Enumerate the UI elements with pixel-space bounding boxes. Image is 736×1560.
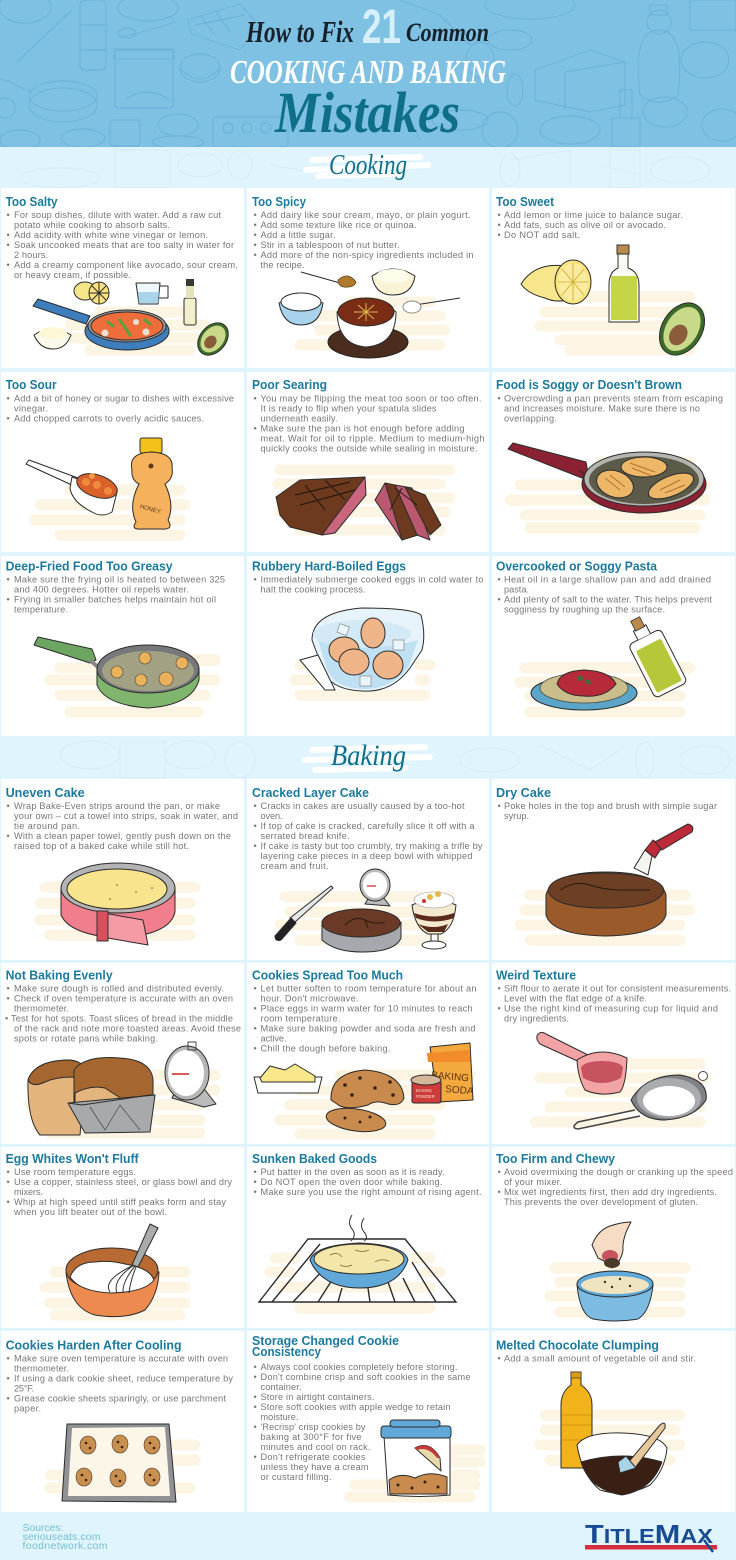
tips: If top of cake is cracked, carefully slice it off with a bbox=[260, 821, 475, 831]
tips: • bbox=[6, 240, 10, 250]
tips: • bbox=[254, 801, 257, 811]
panel: Melted Chocolate Clumping bbox=[492, 1331, 735, 1512]
heading: Too Sweet bbox=[496, 194, 555, 209]
tips: • bbox=[6, 394, 10, 404]
illustration: seared steak bbox=[276, 470, 450, 540]
tips bbox=[6, 574, 225, 614]
tips: your own – cut a towel into strips, soak in water, and bbox=[14, 811, 238, 821]
tips: active. bbox=[260, 1034, 286, 1044]
tips: and increases moisture. Make sure there is no bbox=[504, 404, 700, 414]
tips: • bbox=[6, 1354, 10, 1364]
tips bbox=[6, 1354, 233, 1414]
heading: Food is Soggy or Doesn't Brown bbox=[496, 377, 682, 392]
tips: If cake is tasty but too crumbly, try making a trifle by bbox=[260, 841, 483, 851]
tips: Avoid overmixing the dough or cranking up the speed bbox=[504, 1167, 733, 1177]
tips: container. bbox=[260, 1382, 302, 1392]
tips: You may be flipping the meat too soon or too often. bbox=[260, 394, 482, 404]
tips: • bbox=[6, 1197, 10, 1207]
tips: Chill the dough before baking. bbox=[260, 1044, 390, 1054]
tips: Grease cookie sheets sparingly, or use parchment bbox=[14, 1394, 226, 1404]
tips: Add a bit of honey or sugar to dishes with excessive bbox=[14, 394, 234, 404]
illustration: carrots scoop and honey bear bbox=[26, 438, 185, 535]
tips: Heat oil in a large shallow pan and add drained bbox=[504, 574, 711, 584]
tips: overlapping. bbox=[504, 414, 557, 424]
illustration: butter, cookies, baking powder, soda: BAKING bbox=[416, 1088, 432, 1093]
tips: moisture. bbox=[260, 1412, 298, 1422]
tips: It is ready to flip when your spatula slides bbox=[260, 404, 437, 414]
tips: • bbox=[498, 801, 501, 811]
tips: Add more of the non-spicy ingredients included in bbox=[260, 250, 474, 260]
illustration: cake pan with strip bbox=[40, 863, 195, 945]
tips: • bbox=[6, 831, 10, 841]
heading: Cookies Harden After Cooling bbox=[6, 1338, 182, 1352]
heading: Cooking: Cooking bbox=[329, 149, 407, 181]
illustration: lemon, olive oil and avocado bbox=[521, 245, 714, 363]
title line: Mistakes: Mistakes bbox=[274, 80, 460, 145]
tips: • bbox=[254, 210, 257, 220]
tips bbox=[498, 801, 717, 821]
illustration: measuring cup and sifter bbox=[535, 1032, 708, 1129]
tips: • bbox=[254, 1392, 257, 1402]
tips: hour. Don't microwave. bbox=[260, 994, 358, 1004]
tips: 'Recrisp' crisp cookies by bbox=[260, 1422, 366, 1432]
tips: vinegar. bbox=[14, 404, 48, 414]
panel: Too Spicy bbox=[247, 188, 489, 368]
tips bbox=[498, 394, 723, 424]
tips: raised top of a baked cake while still hot. bbox=[14, 841, 189, 851]
tips: Use the right kind of measuring cup for liquid and bbox=[504, 1004, 718, 1014]
tips: mixers. bbox=[14, 1187, 43, 1197]
tips bbox=[498, 984, 731, 1024]
heading: Not Baking Evenly bbox=[6, 968, 113, 982]
tips: underneath easily. bbox=[260, 414, 338, 424]
heading: Too Firm and Chewy bbox=[496, 1151, 616, 1166]
tips: • bbox=[254, 424, 257, 434]
tips: • bbox=[6, 414, 10, 424]
header banner bbox=[0, 0, 736, 150]
tips: tie around pan. bbox=[14, 821, 80, 831]
tips: serrated bread knife. bbox=[260, 831, 350, 841]
tips: Stir in a tablespoon of nut butter. bbox=[260, 240, 400, 250]
tips: • bbox=[498, 1167, 501, 1177]
tips: room temperature. bbox=[260, 1014, 340, 1024]
panel: Uneven Cake bbox=[1, 779, 244, 960]
tips: Add a creamy component like avocado, sour cream, bbox=[14, 260, 238, 270]
tips: • bbox=[498, 210, 501, 220]
tips bbox=[254, 1167, 482, 1197]
tips: Store soft cookies with apple wedge to retain bbox=[260, 1402, 450, 1412]
tips: meat. Wait for oil to ripple. Medium to medium-high bbox=[260, 434, 484, 444]
tips: • bbox=[6, 994, 10, 1004]
sources: seriouseats.com bbox=[22, 1531, 101, 1543]
tips: Let butter soften to room temperature for about an bbox=[260, 984, 476, 994]
illustration: cake and pastry brush bbox=[520, 824, 693, 940]
tips: • bbox=[6, 230, 10, 240]
tips: • bbox=[254, 574, 257, 584]
tips bbox=[6, 1167, 232, 1217]
tips: Make sure baking powder and soda are fresh and bbox=[260, 1024, 476, 1034]
illustration: carrots scoop and honey bear: HONEY bbox=[139, 504, 161, 516]
tips: Don't refrigerate cookies bbox=[260, 1452, 366, 1462]
tips: Do NOT add salt. bbox=[504, 230, 580, 240]
heading: Melted Chocolate Clumping bbox=[496, 1338, 659, 1352]
tips bbox=[5, 984, 241, 1044]
tips: • bbox=[254, 1024, 257, 1034]
tips bbox=[498, 574, 712, 614]
tips: Add lemon or lime juice to balance sugar. bbox=[504, 210, 683, 220]
tips: and 400 degrees. Hotter oil repels water. bbox=[14, 584, 189, 594]
tips: Soak uncooked meats that are too salty in water for bbox=[14, 240, 234, 250]
tips: dry ingredients. bbox=[504, 1014, 569, 1024]
section band: Baking bbox=[0, 737, 736, 778]
tips: • bbox=[6, 574, 10, 584]
tips: • bbox=[254, 1187, 257, 1197]
tips: • bbox=[6, 210, 10, 220]
panel: Weird Texture bbox=[492, 963, 735, 1144]
panel: Too Sour bbox=[1, 372, 244, 552]
heading: Overcooked or Soggy Pasta bbox=[496, 558, 658, 574]
tips: pasta. bbox=[504, 584, 529, 594]
tips: • bbox=[498, 394, 501, 404]
tips: Test for hot spots. Toast slices of bread in the middle bbox=[11, 1014, 233, 1024]
tips: Use a copper, stainless steel, or glass bowl and dry bbox=[14, 1177, 232, 1187]
tips: layering cake pieces in a deep bowl with whipped bbox=[260, 851, 472, 861]
tips: minutes and cool on rack. bbox=[260, 1442, 370, 1452]
panel: Rubbery Hard-Boiled Eggs bbox=[247, 556, 489, 736]
illustration: salty pan with lemon, cup, vinegar, avocado bbox=[33, 279, 235, 361]
title line: How to Fix 21 Common: 21 bbox=[362, 1, 401, 54]
tips: • bbox=[254, 240, 257, 250]
tips: • bbox=[6, 1177, 10, 1187]
tips: Frying in smaller batches helps maintain hot oil bbox=[14, 594, 216, 604]
illustration: butter, cookies, baking powder, soda: BAKING bbox=[431, 1070, 470, 1084]
tips bbox=[498, 210, 683, 240]
tips: • bbox=[498, 984, 501, 994]
tips: • bbox=[498, 220, 501, 230]
tips: or custard filling. bbox=[260, 1472, 332, 1482]
illustration: cookie sheet bbox=[50, 1424, 195, 1502]
tips: Add a little sugar. bbox=[260, 230, 336, 240]
tips: • bbox=[6, 984, 10, 994]
illustration: bread loaves, tin and thermometer bbox=[28, 1042, 216, 1135]
tips: • bbox=[254, 394, 257, 404]
tips: For soup dishes, dilute with water. Add a raw cut bbox=[14, 210, 221, 220]
tips bbox=[6, 394, 234, 424]
heading: Egg Whites Won't Fluff bbox=[6, 1151, 139, 1166]
tips bbox=[6, 210, 238, 280]
tips: Use room temperature eggs. bbox=[14, 1167, 136, 1177]
tips: With a clean paper towel, gently push down on the bbox=[14, 831, 231, 841]
panel: Cracked Layer Cake bbox=[247, 779, 489, 960]
tips: • bbox=[254, 250, 257, 260]
tips: thermometer. bbox=[14, 1364, 69, 1374]
heading: Too Salty bbox=[6, 194, 58, 209]
white brush behind heading bbox=[305, 747, 430, 770]
tips: • bbox=[6, 1374, 10, 1384]
tips: This prevents the over development of gluten. bbox=[504, 1197, 698, 1207]
tips: Add some texture like rice or quinoa. bbox=[260, 220, 416, 230]
tips: oven. bbox=[260, 811, 282, 821]
tips: Do NOT open the oven door while baking. bbox=[260, 1177, 442, 1187]
tips: • bbox=[254, 984, 257, 994]
logo: TitleMax: TITLE MAX bbox=[585, 1519, 714, 1549]
panel: Deep-Fried Food Too Greasy bbox=[1, 556, 244, 736]
tips: • bbox=[498, 230, 501, 240]
tips: • bbox=[5, 1014, 8, 1024]
tips: Poke holes in the top and brush with simple sugar bbox=[504, 801, 717, 811]
illustration: green pan with frying food bbox=[34, 637, 215, 712]
title line: Cooking and Baking: COOKING AND BAKING bbox=[230, 54, 506, 91]
tips: Add fats, such as olive oil or avocado. bbox=[504, 220, 666, 230]
tips: Wrap Bake-Even strips around the pan, or make bbox=[14, 801, 220, 811]
tips: sogginess by roughing up the surface. bbox=[504, 604, 665, 614]
tips: Whip at high speed until stiff peaks form and stay bbox=[14, 1197, 226, 1207]
tips: • bbox=[6, 594, 10, 604]
tips: If using a dark cookie sheet, reduce temperature by bbox=[14, 1374, 233, 1384]
heading: Too Sour bbox=[6, 377, 57, 392]
heading: Dry Cake bbox=[496, 785, 551, 800]
illustration: butter, cookies, baking powder, soda: POWDER bbox=[416, 1094, 435, 1099]
tips bbox=[254, 1362, 470, 1482]
illustration: knife, thermometer, cracked cake, trifle bbox=[275, 869, 456, 952]
tips: Add acidity with white wine vinegar or lemon. bbox=[14, 230, 208, 240]
tips: • bbox=[254, 1402, 257, 1412]
illustration: crowded pan with cutlets bbox=[508, 443, 706, 528]
tips bbox=[6, 801, 238, 851]
tips bbox=[254, 394, 484, 454]
heading: Baking: Baking bbox=[331, 739, 406, 772]
tips: • bbox=[254, 1167, 257, 1177]
heading: Uneven Cake bbox=[6, 785, 85, 800]
illustration: sunken bake on oven rack bbox=[259, 1215, 456, 1308]
tips: syrup. bbox=[504, 811, 529, 821]
tips: • bbox=[498, 1354, 501, 1364]
tips: thermometer. bbox=[14, 1004, 69, 1014]
panel: Overcooked or Soggy Pasta bbox=[492, 556, 735, 736]
illustration: chili with rice, cream, nut butter, sugar bbox=[279, 269, 460, 358]
tips: Place eggs in warm water for 10 minutes to reach bbox=[260, 1004, 472, 1014]
sources: foodnetwork.com bbox=[22, 1540, 108, 1552]
tips: temperature. bbox=[14, 604, 68, 614]
heading: Rubbery Hard-Boiled Eggs bbox=[252, 558, 406, 574]
tips: 25°F. bbox=[14, 1384, 34, 1394]
tips: Don't combine crisp and soft cookies in the same bbox=[260, 1372, 470, 1382]
tips bbox=[254, 801, 483, 871]
tips: Check if oven temperature is accurate with an oven bbox=[14, 994, 233, 1004]
tips: quickly cooks the outside while sealing in moisture. bbox=[260, 444, 478, 454]
tips: paper. bbox=[14, 1404, 41, 1414]
heading: Deep-Fried Food Too Greasy bbox=[6, 558, 173, 574]
panel: Cookies Harden After Cooling bbox=[1, 1331, 244, 1512]
tips: Add dairy like sour cream, mayo, or plain yogurt. bbox=[260, 210, 470, 220]
tips: Make sure the pan is hot enough before adding bbox=[260, 424, 464, 434]
illustration: glass bowl of eggs and ice water bbox=[295, 608, 430, 695]
tips: Immediately submerge cooked eggs in cold water to bbox=[260, 574, 484, 584]
tips: • bbox=[254, 230, 257, 240]
heading: Sunken Baked Goods bbox=[252, 1151, 377, 1166]
tips: • bbox=[254, 220, 257, 230]
tips: Make sure the frying oil is heated to between 325 bbox=[14, 574, 225, 584]
tips: cream and fruit. bbox=[260, 861, 328, 871]
tips bbox=[254, 210, 474, 270]
panel: Too Firm and Chewy bbox=[492, 1147, 735, 1328]
title line: How to Fix 21 Common: Common bbox=[406, 18, 489, 47]
panel: Dry Cake bbox=[492, 779, 735, 960]
tips: Level with the flat edge of a knife. bbox=[504, 994, 647, 1004]
panel: Storage Changed Cookie Consistency bbox=[247, 1331, 489, 1512]
tips: Mix wet ingredients first, then add dry ingredients. bbox=[504, 1187, 717, 1197]
tips: Add a small amount of vegetable oil and stir. bbox=[504, 1354, 696, 1364]
panel: Too Salty bbox=[1, 188, 244, 368]
section band: Cooking bbox=[0, 147, 736, 188]
panel: Cookies Spread Too Much bbox=[247, 963, 489, 1144]
illustration: whisk in orange bowl bbox=[45, 1224, 185, 1317]
heading: Storage Changed Cookie bbox=[252, 1333, 399, 1348]
illustration: butter, cookies, baking powder, soda bbox=[254, 1043, 474, 1135]
tips bbox=[498, 1167, 733, 1207]
tips: • bbox=[498, 1004, 501, 1014]
tips: • bbox=[254, 1177, 257, 1187]
tips: Sift flour to aerate it out for consistent measurements. bbox=[504, 984, 731, 994]
heading: Too Spicy bbox=[252, 194, 307, 209]
tips: • bbox=[254, 1362, 257, 1372]
tips: potato while cooking to absorb salts. bbox=[14, 220, 170, 230]
tips: • bbox=[6, 801, 10, 811]
tips bbox=[254, 984, 476, 1054]
footer bbox=[0, 1512, 736, 1560]
tips: when you lift beater out of the bowl. bbox=[13, 1207, 167, 1217]
heading: Poor Searing bbox=[252, 377, 327, 392]
panel: Sunken Baked Goods bbox=[247, 1147, 489, 1328]
title line: How to Fix 21 Common bbox=[245, 1, 489, 54]
tips: baking at 300°F for five bbox=[260, 1432, 362, 1442]
tips: • bbox=[254, 1372, 257, 1382]
tips: of your mixer. bbox=[504, 1177, 562, 1187]
heading: Cracked Layer Cake bbox=[252, 785, 369, 800]
panel: Not Baking Evenly bbox=[1, 963, 244, 1144]
tips: Make sure you use the right amount of rising agent. bbox=[260, 1187, 482, 1197]
panel: Food is Soggy or Doesn't Brown bbox=[492, 372, 735, 552]
tips bbox=[254, 574, 484, 594]
title bbox=[230, 1, 506, 145]
tips: • bbox=[498, 594, 501, 604]
tips: Add chopped carrots to overly acidic sauces. bbox=[14, 414, 204, 424]
tips: 2 hours. bbox=[14, 250, 48, 260]
tips: Put batter in the oven as soon as it is ready. bbox=[260, 1167, 444, 1177]
tips: • bbox=[254, 1004, 257, 1014]
illustration: oil bottle and chocolate bowl bbox=[540, 1372, 680, 1495]
tips: • bbox=[254, 841, 257, 851]
tips: Make sure dough is rolled and distributed evenly. bbox=[14, 984, 224, 994]
sources: Sources: bbox=[22, 1522, 64, 1534]
heading: Weird Texture bbox=[496, 968, 576, 982]
tips: of the rack and note more toasted areas. Avoid these bbox=[14, 1024, 241, 1034]
heading: Cookies Spread Too Much bbox=[252, 968, 403, 982]
tips: Add plenty of salt to the water. This helps prevent bbox=[504, 594, 712, 604]
tips: • bbox=[254, 1422, 257, 1432]
tips: Cracks in cakes are usually caused by a too-hot bbox=[260, 801, 465, 811]
tips: Make sure oven temperature is accurate with oven bbox=[14, 1354, 228, 1364]
tips: Always cool cookies completely before storing. bbox=[260, 1362, 458, 1372]
tips: • bbox=[6, 1167, 10, 1177]
tips: • bbox=[254, 1452, 257, 1462]
tips: • bbox=[254, 1044, 257, 1054]
illustration: spaghetti plate and olive oil bbox=[520, 611, 690, 712]
tips: • bbox=[6, 260, 10, 270]
tips: unless they have a cream bbox=[260, 1462, 369, 1472]
tips: • bbox=[6, 1394, 10, 1404]
heading bbox=[252, 1333, 399, 1359]
tips: halt the cooking process. bbox=[260, 584, 366, 594]
panel: Too Sweet bbox=[492, 188, 735, 368]
tips: • bbox=[498, 1187, 501, 1197]
white brush behind heading bbox=[306, 157, 428, 176]
illustration: hand adding ingredients to blue bowl bbox=[550, 1222, 685, 1321]
panel: Poor Searing bbox=[247, 372, 489, 552]
sources bbox=[22, 1522, 108, 1552]
tips: or heavy cream, if possible. bbox=[14, 270, 131, 280]
tips: Store in airtight containers. bbox=[260, 1392, 374, 1402]
tips: spots or rotate pans while baking. bbox=[14, 1034, 158, 1044]
heading: Consistency bbox=[252, 1344, 322, 1359]
illustration: butter, cookies, baking powder, soda: SODA bbox=[445, 1084, 474, 1097]
panel: Egg Whites Won't Fluff bbox=[1, 1147, 244, 1328]
illustration: storage jar with apple and cookies bbox=[350, 1420, 480, 1497]
tips: • bbox=[498, 574, 501, 584]
tips: the recipe. bbox=[260, 260, 304, 270]
title line: How to Fix 21 Common: How to Fix bbox=[245, 14, 354, 49]
tips: • bbox=[254, 821, 257, 831]
tips: Overcrowding a pan prevents steam from escaping bbox=[504, 394, 723, 404]
